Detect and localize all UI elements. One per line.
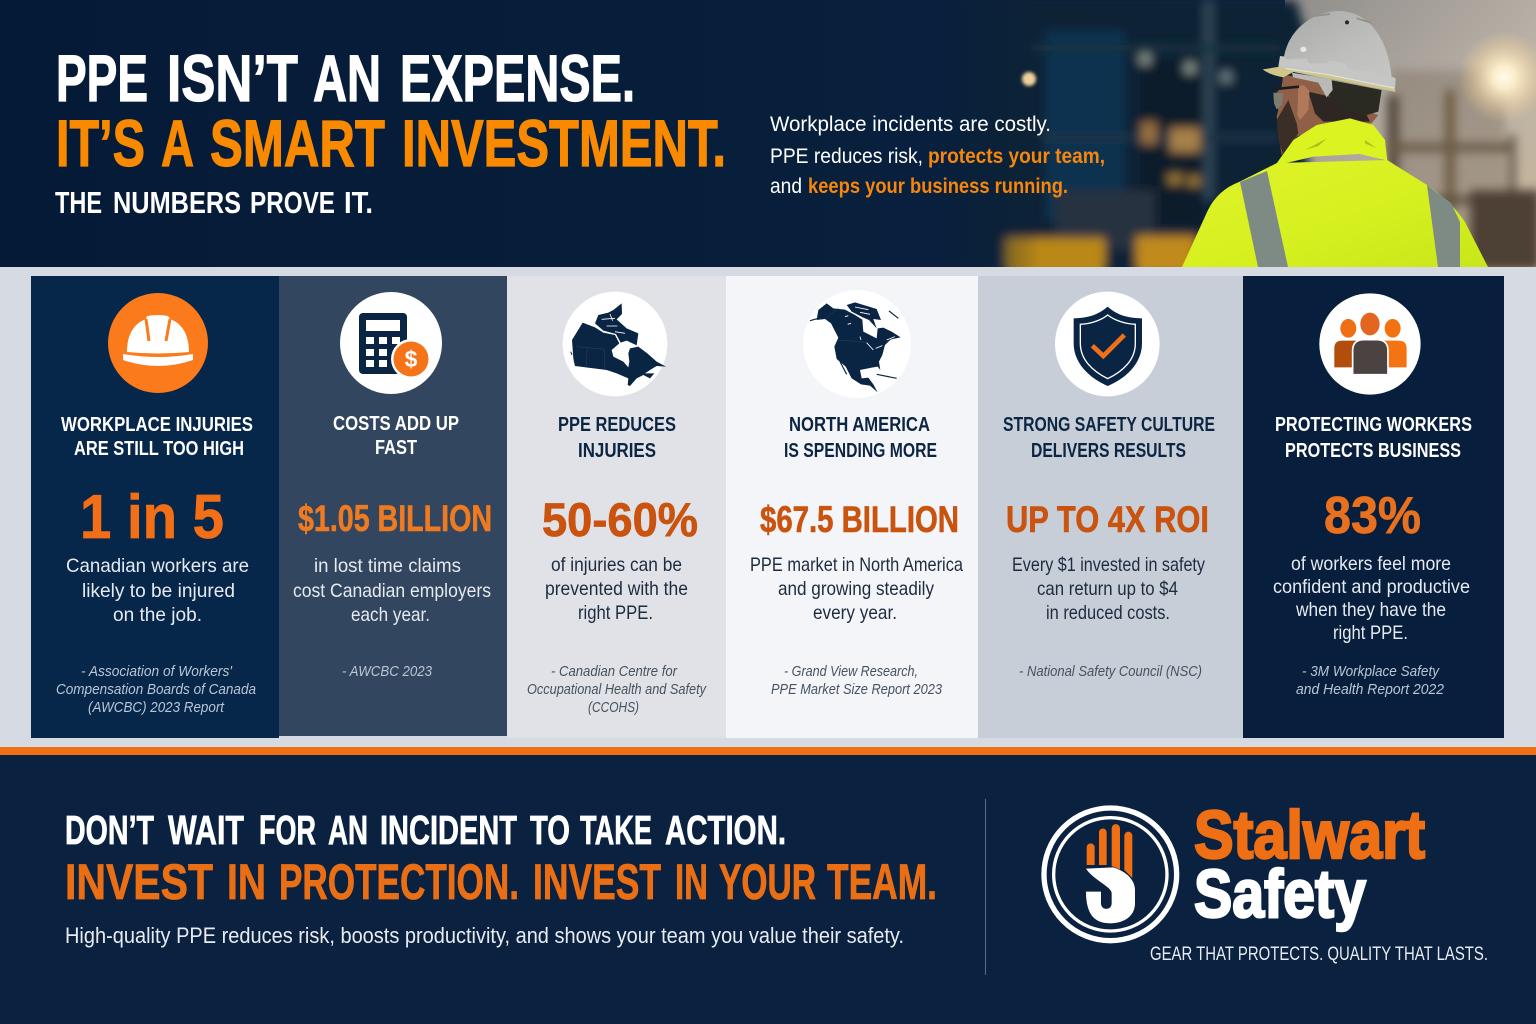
title: AN xyxy=(313,41,381,115)
description: can return up to $4 xyxy=(1037,578,1178,600)
stat: $67.5 billion: $67.5 BILLION xyxy=(760,499,959,540)
heading: WORKPLACE INJURIES xyxy=(61,413,253,436)
call to action: PROTECTION. xyxy=(279,854,519,910)
source: - 3M Workplace Safety xyxy=(1302,664,1440,680)
icon: calculator with dollar: $ xyxy=(405,346,418,372)
heading xyxy=(61,413,253,460)
intro text xyxy=(770,112,1105,198)
source: and Health Report 2022 xyxy=(1296,682,1444,698)
panel: workplace injuries xyxy=(31,276,279,738)
heading: DELIVERS RESULTS xyxy=(1031,439,1186,462)
description: every year. xyxy=(813,602,897,624)
panel: costs add up xyxy=(279,276,507,736)
call to action: ACTION. xyxy=(665,807,786,853)
intro text: protects your team, xyxy=(928,144,1105,168)
heading: NORTH AMERICA xyxy=(789,413,930,436)
description: PPE market in North America xyxy=(750,554,963,576)
source xyxy=(1296,664,1444,698)
source: - Grand View Research, xyxy=(784,664,918,680)
source: (AWCBC) 2023 Report xyxy=(88,700,225,716)
source xyxy=(527,664,707,716)
heading: ARE STILL TOO HIGH xyxy=(74,437,244,460)
title: PROVE xyxy=(250,185,335,220)
icon: group of people xyxy=(1319,293,1421,395)
source: Compensation Boards of Canada xyxy=(56,682,256,698)
call to action: FOR xyxy=(259,807,316,853)
intro text: keeps your business running. xyxy=(808,174,1068,198)
call to action: TAKE xyxy=(580,807,652,853)
source: Occupational Health and Safety xyxy=(527,682,707,698)
title: SMART xyxy=(210,106,385,180)
call to action: INVEST xyxy=(65,854,213,910)
heading: PPE REDUCES xyxy=(558,413,676,436)
illustration: worker in hi-vis jacket and hard hat xyxy=(1182,11,1488,267)
wordmark xyxy=(1194,797,1425,932)
heading xyxy=(1275,413,1472,462)
title: INVESTMENT. xyxy=(402,106,726,180)
wordmark: Stalwart xyxy=(1194,797,1425,873)
orange divider band xyxy=(0,747,1536,755)
description: likely to be injured xyxy=(82,580,235,602)
title: PPE xyxy=(56,41,148,115)
call to action: WAIT xyxy=(168,807,244,853)
stat: 83%: 83% xyxy=(1324,487,1421,545)
description xyxy=(750,554,963,624)
icon: map of Canada xyxy=(563,292,667,396)
jacket collar xyxy=(1275,118,1387,166)
footer background xyxy=(0,755,1536,1024)
hard hat xyxy=(1263,11,1396,92)
description xyxy=(545,554,688,624)
stat: 1 in 5: 1 in 5 xyxy=(80,483,224,552)
description: confident and productive xyxy=(1273,576,1470,598)
description: right PPE. xyxy=(578,602,653,624)
call to action: YOUR xyxy=(719,854,816,910)
heading xyxy=(333,412,459,459)
intro text: PPE reduces risk, xyxy=(770,144,923,168)
call to action: IN xyxy=(227,854,266,910)
jacket body xyxy=(1182,160,1488,267)
description: right PPE. xyxy=(1333,622,1408,644)
intro text: Workplace incidents are costly. xyxy=(770,112,1051,136)
panel: North America spending xyxy=(726,276,978,738)
heading: PROTECTS BUSINESS xyxy=(1285,439,1461,462)
source: - AWCBC 2023 xyxy=(342,664,432,680)
title: ISN’T xyxy=(167,41,298,115)
call to action: INCIDENT xyxy=(380,807,517,853)
panel: PPE reduces injuries xyxy=(507,276,726,738)
source: PPE Market Size Report 2023 xyxy=(771,682,942,698)
logo mark: hand in rings xyxy=(1044,808,1177,941)
icon: calculator with dollar xyxy=(340,292,442,394)
description: when they have the xyxy=(1295,599,1446,621)
call to action: TEAM. xyxy=(827,854,937,910)
description: each year. xyxy=(351,604,430,626)
call to action: TO xyxy=(530,807,570,853)
stat: 50-60%: 50-60% xyxy=(542,493,698,546)
heading: IS SPENDING MORE xyxy=(784,439,937,462)
title: IT. xyxy=(344,185,373,220)
source: (CCOHS) xyxy=(588,700,639,716)
description: of workers feel more xyxy=(1291,553,1451,575)
logo: Stalwart Safety xyxy=(1044,797,1488,965)
call to action: AN xyxy=(328,807,368,853)
description: Canadian workers are xyxy=(66,555,249,577)
description: and growing steadily xyxy=(778,578,934,600)
worker head xyxy=(1273,73,1382,155)
heading: STRONG SAFETY CULTURE xyxy=(1003,413,1215,436)
heading: COSTS ADD UP xyxy=(333,412,459,435)
title: A xyxy=(161,106,194,180)
heading: FAST xyxy=(375,436,417,459)
right reflective strip xyxy=(1427,185,1460,267)
icon: shield with check xyxy=(1055,292,1160,396)
description: Every $1 invested in safety xyxy=(1012,554,1205,576)
heading xyxy=(1003,413,1215,462)
call to action: DON’T xyxy=(65,807,154,853)
call to action: IN xyxy=(675,854,708,910)
source xyxy=(771,664,942,698)
heading xyxy=(784,413,937,462)
source xyxy=(56,664,256,716)
stats section background xyxy=(0,267,1536,747)
description: cost Canadian employers xyxy=(293,580,491,602)
header banner background xyxy=(0,0,1536,267)
icon: hard hat xyxy=(108,293,208,393)
wordmark: Safety xyxy=(1194,856,1366,932)
title: IT’S xyxy=(56,106,145,180)
stat: up to 4x ROI: UP TO 4X ROI xyxy=(1006,499,1209,540)
description xyxy=(293,555,491,626)
left reflective strip xyxy=(1240,171,1288,267)
description: in lost time claims xyxy=(314,555,461,577)
call to action: High-quality PPE reduces risk, boosts productivity, and shows your team you value their safety. xyxy=(65,923,904,948)
title xyxy=(55,41,726,220)
panel: protecting workers xyxy=(1243,276,1504,738)
source: - National Safety Council (NSC) xyxy=(1019,664,1202,680)
description xyxy=(1012,554,1205,624)
description xyxy=(1273,553,1470,644)
description xyxy=(66,555,249,626)
description: in reduced costs. xyxy=(1046,602,1170,624)
call to action: INVEST xyxy=(533,854,661,910)
description: of injuries can be xyxy=(551,554,682,576)
source: - Canadian Centre for xyxy=(551,664,678,680)
heading: PROTECTING WORKERS xyxy=(1275,413,1472,436)
title: NUMBERS xyxy=(113,185,241,220)
title: THE xyxy=(55,185,102,220)
icon: map of North America xyxy=(803,290,911,398)
description: prevented with the xyxy=(545,578,688,600)
stat: $1.05 billion: $1.05 BILLION xyxy=(298,498,492,539)
header photo: construction site xyxy=(994,0,1536,267)
heading: INJURIES xyxy=(578,439,656,462)
panel: strong safety culture xyxy=(978,276,1243,738)
heading xyxy=(558,413,676,462)
intro text: and xyxy=(770,174,802,198)
source: - Association of Workers' xyxy=(81,664,233,680)
title: EXPENSE. xyxy=(400,41,635,115)
call to action xyxy=(65,807,937,948)
description: on the job. xyxy=(113,604,202,626)
